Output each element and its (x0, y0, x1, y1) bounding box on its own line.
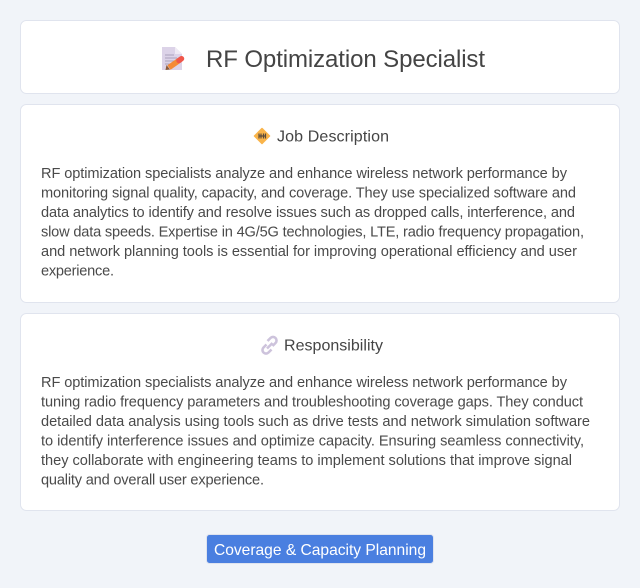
job description text (41, 166, 584, 280)
title: RF Optimization Specialist (206, 46, 485, 73)
job description text: monitoring signal quality, capacity, and coverage. They use specialized software and (41, 186, 576, 202)
panel: responsibility (20, 314, 620, 510)
heading: job description: Job Description (277, 128, 389, 146)
job description text: data analytics to identify and resolve issues such as dropped calls, interference, and (41, 205, 575, 221)
job description text: slow data speeds. Expertise in 4G/5G technologies, LTE, radio frequency propagation, (41, 224, 584, 240)
responsibility text: detailed data analysis using tools such as drive tests and network simulation software (41, 414, 590, 430)
button: coverage and capacity planning (206, 534, 434, 564)
job description text: experience. (41, 264, 114, 280)
responsibility text: they collaborate with engineering teams to implement solutions that improve signal (41, 453, 572, 469)
job description text: and network planning tools is essential for improving operational efficiency and user (41, 244, 577, 260)
responsibility text: RF optimization specialists analyze and enhance wireless network performance by (41, 375, 568, 391)
icon: document with pencil (162, 47, 182, 70)
panel: job description (20, 104, 620, 302)
responsibility text (41, 375, 590, 488)
responsibility text: to identify interference issues and optimize capacity. Ensuring seamless connectivity, (41, 434, 584, 450)
responsibility text: quality and overall user experience. (41, 472, 264, 488)
icon: road sign (254, 128, 270, 144)
button: coverage and capacity planning: Coverage & Capacity Planning (214, 542, 426, 559)
job description text: RF optimization specialists analyze and enhance wireless network performance by (41, 166, 568, 182)
panel: title card (20, 20, 620, 94)
icon: chain link (262, 337, 277, 354)
heading: responsibility: Responsibility (284, 338, 383, 354)
responsibility text: tuning radio frequency parameters and troubleshooting coverage gaps. They conduct (41, 394, 583, 410)
